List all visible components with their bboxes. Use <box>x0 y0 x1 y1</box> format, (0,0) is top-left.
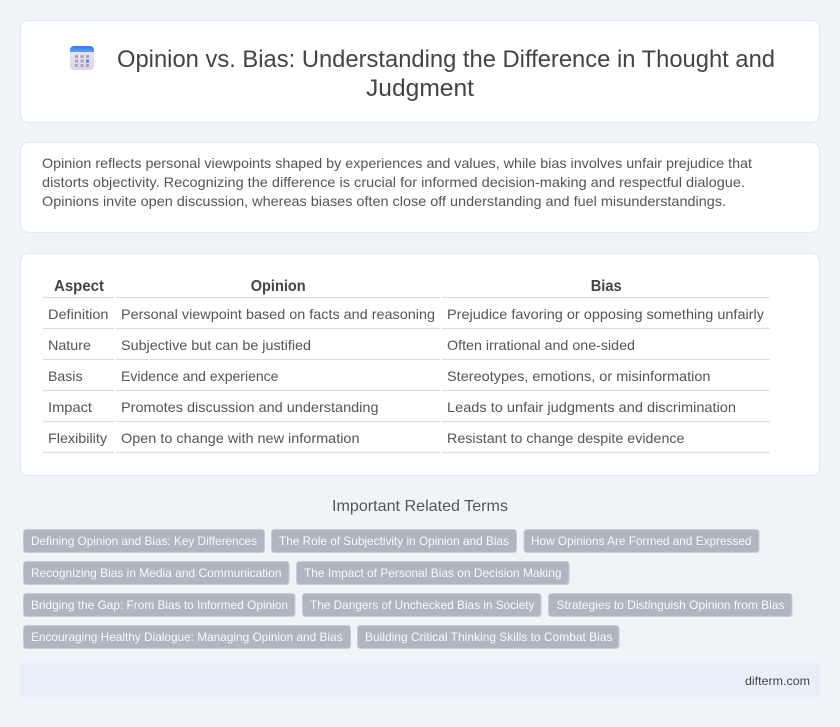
table row: Definition: Prejudice favoring or opposing something unfairly <box>447 306 764 322</box>
table row: Definition <box>43 306 770 328</box>
tag <box>272 530 516 552</box>
tag: The Dangers of Unchecked Bias in Society <box>310 598 534 612</box>
table row: Basis <box>43 368 770 390</box>
intro paragraph: Opinions invite open discussion, whereas biases often close off understanding and fuel misunderstandings. <box>42 193 726 209</box>
tag <box>302 594 541 616</box>
intro paragraph: distorts objectivity. Recognizing the difference is crucial for informed decision-making and respectful dialogue. <box>42 174 745 190</box>
panel: comparison table <box>20 254 820 476</box>
tag: Building Critical Thinking Skills to Combat Bias <box>365 630 612 644</box>
table row: Nature: Subjective but can be justified <box>121 337 311 353</box>
title: Judgment <box>366 75 474 102</box>
table row: Definition: Personal viewpoint based on facts and reasoning <box>121 306 435 322</box>
table row: Basis: Evidence and experience <box>121 368 279 384</box>
tag <box>24 562 289 584</box>
table row: Impact <box>43 399 770 422</box>
table header row: Aspect <box>54 278 105 295</box>
tag: Strategies to Distinguish Opinion from Bias <box>556 598 784 612</box>
table row: Flexibility <box>43 430 770 452</box>
tag <box>24 626 350 648</box>
tag <box>24 530 264 552</box>
tag: Recognizing Bias in Media and Communication <box>31 566 282 580</box>
panel: intro text <box>20 142 820 232</box>
table header row <box>43 278 770 298</box>
table row: Nature: Often irrational and one-sided <box>447 337 635 353</box>
table header row: Opinion <box>251 278 306 295</box>
table row: Flexibility: Resistant to change despite evidence <box>447 430 685 446</box>
tag: Defining Opinion and Bias: Key Differences <box>31 534 257 548</box>
table header row: Bias <box>591 278 622 295</box>
table row: Basis: Basis <box>48 368 82 384</box>
table row: Nature: Nature <box>48 337 91 353</box>
table row: Flexibility: Flexibility <box>48 430 107 446</box>
tag <box>296 562 569 584</box>
tag: The Impact of Personal Bias on Decision Making <box>304 566 562 580</box>
footer bar <box>20 663 820 697</box>
heading: related terms: Important Related Terms <box>332 498 508 515</box>
table row: Impact: Promotes discussion and understanding <box>121 399 378 415</box>
intro paragraph <box>42 155 752 209</box>
table row: Basis: Stereotypes, emotions, or misinformation <box>447 368 710 384</box>
tag <box>24 594 295 616</box>
tag <box>524 530 759 552</box>
icon: calendar <box>70 46 94 70</box>
title <box>117 46 775 102</box>
panel: title header <box>20 20 820 122</box>
table row: Impact: Leads to unfair judgments and discrimination <box>447 399 736 415</box>
table row: Nature <box>43 337 770 360</box>
tag: How Opinions Are Formed and Expressed <box>531 534 752 548</box>
tag: Bridging the Gap: From Bias to Informed Opinion <box>31 598 288 612</box>
footer bar: difterm.com <box>745 674 810 688</box>
tag <box>548 594 792 616</box>
tag: The Role of Subjectivity in Opinion and Bias <box>279 534 509 548</box>
tag <box>358 626 619 648</box>
table row: Definition: Definition <box>48 306 108 322</box>
table row: Impact: Impact <box>48 399 92 415</box>
panel: related term tags <box>24 530 792 648</box>
table row: Flexibility: Open to change with new information <box>121 430 360 446</box>
tag: Encouraging Healthy Dialogue: Managing Opinion and Bias <box>31 630 342 644</box>
title: Opinion vs. Bias: Understanding the Difference in Thought and <box>117 46 775 73</box>
intro paragraph: Opinion reflects personal viewpoints shaped by experiences and values, while bias involves unfair prejudice that <box>42 155 752 171</box>
